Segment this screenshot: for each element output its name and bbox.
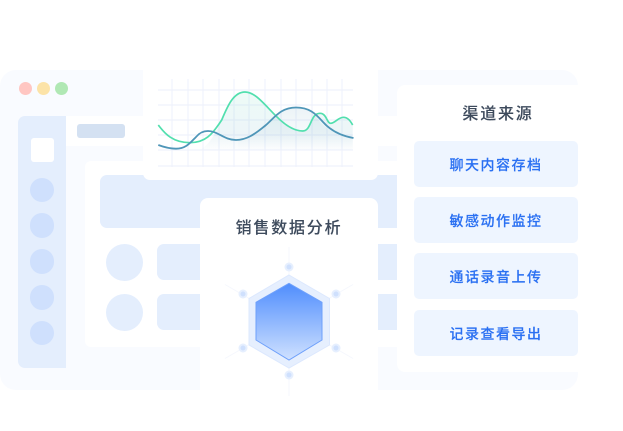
- content avatar 1: [106, 244, 142, 280]
- icon: green window dot: [55, 82, 68, 94]
- sidebar circle 5: [30, 321, 54, 345]
- top toolbar band: [66, 116, 397, 146]
- sidebar circle 3: [30, 249, 54, 274]
- icon: yellow window dot: [36, 82, 50, 94]
- button: chat archive: 聊天内容存档: [450, 157, 542, 173]
- panel: line chart card: [142, 60, 378, 180]
- content avatar 2: [106, 294, 142, 331]
- radar chart: [225, 247, 353, 396]
- heading: sales analysis: 销售数据分析: [236, 220, 342, 237]
- sidebar circle 4: [30, 285, 54, 310]
- button: call recording upload: 通话录音上传: [450, 269, 542, 285]
- toolbar pill: [77, 124, 125, 138]
- content row bar 2: [157, 294, 397, 330]
- heading: channel sources: 渠道来源: [462, 106, 534, 123]
- icon: red window dot: [18, 82, 32, 94]
- panel: content area: [85, 161, 397, 347]
- sidebar circle 1: [30, 178, 54, 202]
- button: call recording upload: [414, 253, 578, 299]
- content row bar 1: [157, 244, 397, 280]
- sidebar circle 2: [30, 213, 54, 238]
- button: sensitive action monitoring: [414, 197, 578, 243]
- line chart: [158, 79, 354, 167]
- button: sensitive action monitoring: 敏感动作监控: [450, 213, 542, 229]
- button: record export: 记录查看导出: [450, 326, 542, 342]
- content banner: [100, 175, 397, 228]
- panel: channel sources: [397, 85, 578, 372]
- panel: app window: [0, 70, 578, 390]
- panel: sales analysis card: [200, 198, 378, 390]
- button: chat archive: [414, 141, 578, 187]
- button: record export: [414, 310, 578, 356]
- sidebar white square: [31, 138, 54, 162]
- panel: sidebar: [18, 116, 66, 368]
